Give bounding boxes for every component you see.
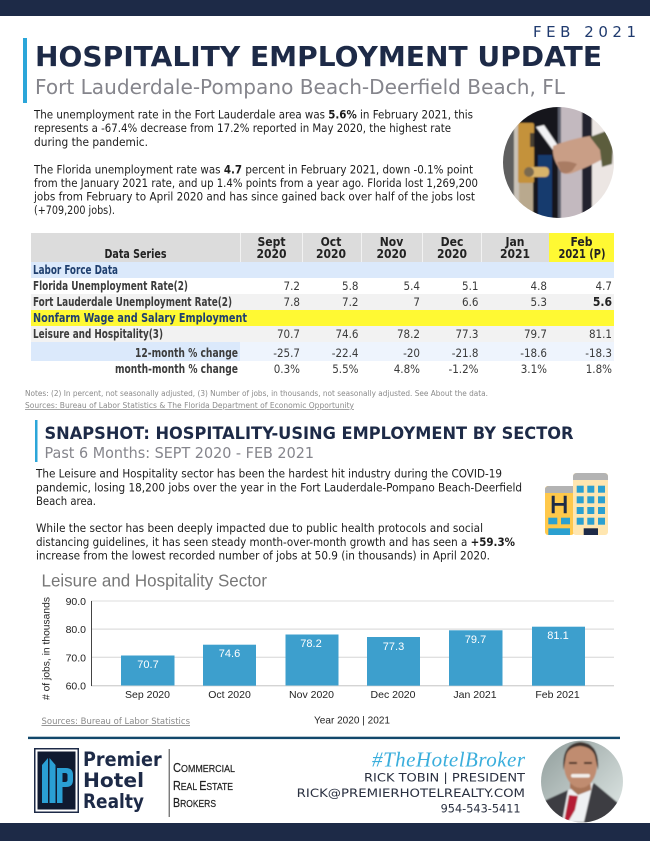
header row: 2020 xyxy=(437,247,467,261)
12-month change row: -25.7 xyxy=(273,346,300,360)
sector text block: pandemic, losing 18,200 jobs over the year in the Fort Lauderdale-Pompano Beach-Deerfield xyxy=(36,481,522,495)
12-month change row: -22.4 xyxy=(332,346,358,360)
x axis labels: Dec 2020 xyxy=(371,689,416,701)
month-month change row: 4.8% xyxy=(394,362,420,376)
header row: 2020 xyxy=(256,247,287,261)
sector text block: distancing guidelines, it has seen steady month-over-month growth and has seen a +59.3% xyxy=(36,535,515,549)
Florida unemployment row: 7.2 xyxy=(284,279,300,293)
sector text block: While the sector has been deeply impacted due to public health protocols and social xyxy=(36,521,483,535)
intro text block: The Florida unemployment rate was 4.7 percent in February 2021, down -0.1% point xyxy=(33,162,473,176)
x axis labels: Jan 2021 xyxy=(453,689,497,701)
Florida unemployment row: 5.8 xyxy=(342,279,358,293)
section accent bar xyxy=(35,420,38,462)
leisure and hospitality row: 81.1 xyxy=(589,327,612,341)
bottom banner xyxy=(0,823,650,841)
header row: Data Series xyxy=(104,247,166,261)
name and title: RICK TOBIN | PRESIDENT xyxy=(364,771,526,785)
nonfarm band: Nonfarm Wage and Salary Employment xyxy=(33,311,247,325)
bar chart xyxy=(40,596,614,701)
bar values xyxy=(137,630,569,671)
header row: Feb xyxy=(571,235,593,249)
intro text block: (+709,200 jobs). xyxy=(34,203,115,217)
Florida unemployment row xyxy=(33,279,612,293)
header row: 2021 (P) xyxy=(558,247,606,261)
header row: 2021 xyxy=(500,247,530,261)
portrait photo xyxy=(540,740,624,824)
contact block xyxy=(297,748,526,816)
12-month change row: 12-month % change xyxy=(135,346,238,360)
Fort Lauderdale unemployment row: Fort Lauderdale Unemployment Rate(2) xyxy=(33,295,232,309)
month-month change row: 1.8% xyxy=(586,362,612,376)
logo wordmark: Hotel xyxy=(83,769,144,792)
sector text block: Beach area. xyxy=(36,494,96,508)
intro text block: The unemployment rate in the Fort Lauderdale area was 5.6% in February 2021, this xyxy=(33,108,473,122)
x axis labels: Nov 2020 xyxy=(289,689,334,701)
sector text block xyxy=(35,467,522,562)
Fort Lauderdale unemployment row: 7.2 xyxy=(342,295,358,309)
title: HOSPITALITY EMPLOYMENT UPDATE xyxy=(35,41,602,73)
sector text block: The Leisure and Hospitality sector has been the hardest hit industry during the COVID-19 xyxy=(35,467,502,481)
header row xyxy=(31,233,614,262)
logo wordmark xyxy=(83,748,162,813)
logo wordmark: Realty xyxy=(83,790,144,813)
bar values: 79.7 xyxy=(465,634,486,646)
bar values: 77.3 xyxy=(383,641,404,653)
header row: 2020 xyxy=(376,247,407,261)
leisure and hospitality row: 77.3 xyxy=(455,327,478,341)
y axis labels: 80.0 xyxy=(66,624,86,636)
labor force data band xyxy=(31,262,614,278)
Fort Lauderdale unemployment row: 7 xyxy=(413,295,420,309)
logo mark xyxy=(34,748,79,813)
footer rule xyxy=(28,737,620,739)
header row: Dec xyxy=(441,235,463,249)
logo: Premier Hotel Realty xyxy=(34,748,162,813)
header row: Nov xyxy=(380,235,403,249)
nonfarm band xyxy=(31,310,614,326)
bar values: 74.6 xyxy=(219,648,240,660)
hashtag: #TheHotelBroker xyxy=(372,748,526,772)
leisure and hospitality row: Leisure and Hospitality(3) xyxy=(33,327,163,341)
12-month change row xyxy=(31,342,614,361)
y axis labels xyxy=(66,596,86,692)
12-month change row: -21.8 xyxy=(452,346,478,360)
12-month change row: -18.3 xyxy=(585,346,612,360)
section heading: SNAPSHOT: HOSPITALITY-USING EMPLOYMENT BY SECTOR xyxy=(44,424,574,444)
table sources: Sources: Bureau of Labor Statistics & The Florida Department of Economic Opportunity xyxy=(25,401,354,410)
y axis labels: 90.0 xyxy=(66,596,86,608)
logo tagline: COMMERCIAL xyxy=(173,761,235,775)
y axis labels: 70.0 xyxy=(66,652,86,664)
phone: 954-543-5411 xyxy=(441,802,521,816)
intro text block: jobs from February to April 2020 and has since gained back over half of the jobs lost xyxy=(33,190,475,204)
logo tagline: REAL ESTATE xyxy=(173,779,233,793)
y axis labels: 60.0 xyxy=(66,680,86,692)
Florida unemployment row: Florida Unemployment Rate(2) xyxy=(33,279,188,293)
subtitle: Fort Lauderdale-Pompano Beach-Deerfield Beach, FL xyxy=(35,75,566,99)
intro text block xyxy=(33,108,478,217)
x axis labels xyxy=(125,689,580,701)
month-month change row: 0.3% xyxy=(274,362,300,376)
Fort Lauderdale unemployment row: 6.6 xyxy=(462,295,478,309)
x axis title: Year 2020 | 2021 xyxy=(314,714,390,726)
photo: hand holding key card at door lock xyxy=(503,107,614,218)
section subheading: Past 6 Months: SEPT 2020 - FEB 2021 xyxy=(44,444,314,462)
logo tagline xyxy=(173,761,235,810)
date label: FEB 2021 xyxy=(533,23,636,41)
month-month change row xyxy=(115,362,612,376)
logo tagline: BROKERS xyxy=(173,796,216,810)
month-month change row: month-month % change xyxy=(115,362,238,376)
intro text block: from the January 2021 rate, and up 1.4% points from a year ago. Florida lost 1,269,200 xyxy=(34,176,478,190)
month-month change row: 3.1% xyxy=(521,362,547,376)
labor force data band: Labor Force Data xyxy=(33,263,118,277)
x axis labels: Oct 2020 xyxy=(208,689,251,701)
y axis title: # of jobs, in thousands xyxy=(40,597,52,700)
leisure and hospitality row: 79.7 xyxy=(524,327,547,341)
top banner xyxy=(0,0,650,16)
header row: Oct xyxy=(321,235,341,249)
chart title: Leisure and Hospitality Sector xyxy=(42,571,267,591)
logo wordmark: Premier xyxy=(83,748,162,771)
header row: Sept xyxy=(258,235,286,249)
bar values: 70.7 xyxy=(137,659,159,671)
header row: Jan xyxy=(505,235,524,249)
bars xyxy=(121,627,585,686)
Fort Lauderdale unemployment row: 5.6 xyxy=(593,295,612,309)
intro text block: during the pandemic. xyxy=(34,135,148,149)
leisure and hospitality row xyxy=(31,326,614,342)
chart sources: Sources: Bureau of Labor Statistics xyxy=(42,717,190,727)
leisure and hospitality row: 70.7 xyxy=(277,327,300,341)
Florida unemployment row: 4.7 xyxy=(596,279,612,293)
data table xyxy=(31,233,614,376)
bar values: 78.2 xyxy=(300,638,322,650)
email: RICK@PREMIERHOTELREALTY.COM xyxy=(297,786,525,800)
12-month change row: -20 xyxy=(403,346,420,360)
icon: hotel building xyxy=(545,473,608,535)
x axis labels: Feb 2021 xyxy=(535,689,580,701)
Fort Lauderdale unemployment row xyxy=(31,294,614,310)
12-month change row: -18.6 xyxy=(520,346,547,360)
Florida unemployment row: 4.8 xyxy=(531,279,547,293)
sector text block: increase from the lowest recorded number of jobs at 50.9 (in thousands) in April 2020. xyxy=(36,548,490,562)
header row: 2020 xyxy=(316,247,346,261)
Florida unemployment row: 5.1 xyxy=(462,279,478,293)
Fort Lauderdale unemployment row: 7.8 xyxy=(284,295,300,309)
bar values: 81.1 xyxy=(547,630,569,642)
month-month change row: -1.2% xyxy=(448,362,479,376)
leisure and hospitality row: 78.2 xyxy=(397,327,420,341)
title accent bar xyxy=(23,38,27,103)
leisure and hospitality row: 74.6 xyxy=(335,327,358,341)
intro text block: represents a -67.4% decrease from 17.2% reported in May 2020, the highest rate xyxy=(34,121,451,135)
x axis labels: Sep 2020 xyxy=(125,689,170,701)
table notes: Notes: (2) In percent, not seasonally adjusted, (3) Number of jobs, in thousands, not seasonally adjusted. See About the data. xyxy=(25,389,488,398)
Fort Lauderdale unemployment row: 5.3 xyxy=(531,295,547,309)
Florida unemployment row: 5.4 xyxy=(404,279,420,293)
month-month change row: 5.5% xyxy=(332,362,359,376)
logo divider xyxy=(169,749,170,817)
